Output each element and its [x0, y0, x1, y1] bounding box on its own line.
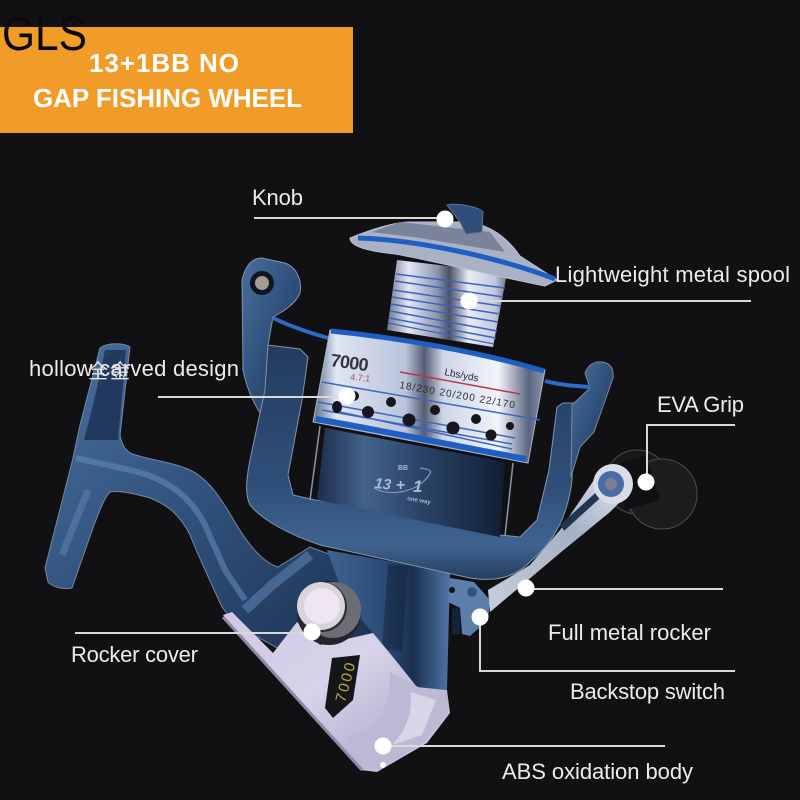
- callout: full metal rocker: [518, 580, 723, 645]
- metal spool: [387, 260, 507, 347]
- callout: hollow-carved design: [29, 356, 356, 404]
- callout: EVA grip: EVA Grip: [657, 392, 744, 417]
- 13+1 logo engraving: 1: [413, 477, 422, 496]
- callout: knob: Knob: [252, 185, 303, 210]
- badge: 7000: 7000: [332, 661, 359, 704]
- spool flange: [350, 222, 557, 286]
- title banner: GAP FISHING WHEEL: [33, 83, 302, 113]
- front frame U-shaped rotor: [247, 345, 574, 579]
- callout: hollow-carved design: 全金: [88, 360, 130, 383]
- main cylinder body: [310, 426, 513, 537]
- knob cap: [447, 204, 483, 234]
- right bail arm: [571, 362, 613, 477]
- rocker cover knob: [297, 581, 361, 645]
- callout: rocker cover: [71, 624, 320, 667]
- bail screw: [250, 271, 274, 295]
- fishing reel illustration: [45, 204, 697, 772]
- reel foot: blue body: [327, 550, 450, 690]
- crank handle arm: [45, 344, 380, 655]
- callout: backstop switch: [472, 608, 735, 704]
- EVA grip: [605, 450, 697, 529]
- callout: ABS oxidation body: [374, 738, 693, 784]
- 13+1 logo engraving: BB: [398, 465, 408, 472]
- callout: EVA grip: [638, 392, 744, 490]
- silver ABS body: [223, 612, 450, 772]
- callout: knob: [252, 185, 454, 228]
- line capacity drum: 7000: [329, 350, 370, 375]
- brand GLS: GLS: [2, 8, 87, 61]
- callout: full metal rocker: Full metal rocker: [548, 620, 711, 645]
- 13+1 logo engraving: +: [396, 477, 405, 494]
- title banner: 13+1BB NO: [89, 48, 239, 78]
- line capacity drum: Lbs/yds: [443, 367, 479, 385]
- 13+1 logo engraving: 13: [374, 475, 393, 494]
- callout: backstop switch: Backstop switch: [570, 679, 725, 704]
- callout: ABS oxidation body: ABS oxidation body: [502, 759, 693, 784]
- line capacity drum: 4.7:1: [350, 372, 371, 384]
- line capacity drum: 18/230 20/200 22/170: [398, 380, 516, 411]
- badge: 7000: [325, 655, 360, 718]
- title banner: [0, 27, 353, 133]
- callout: lightweight metal spool: [460, 262, 790, 310]
- line capacity drum: [313, 330, 545, 463]
- callout: hollow-carved design: hollow carved design: [29, 356, 239, 381]
- callout: rocker cover: Rocker cover: [71, 642, 198, 667]
- left bail arm: [242, 258, 300, 413]
- backstop switch: [448, 578, 490, 636]
- callout: lightweight metal spool: Lightweight metal spool: [555, 262, 790, 287]
- 13+1 logo engraving: [374, 465, 432, 506]
- full metal rocker: [488, 464, 633, 612]
- 13+1 logo engraving: one way: [407, 496, 432, 506]
- bail wire: [273, 318, 590, 387]
